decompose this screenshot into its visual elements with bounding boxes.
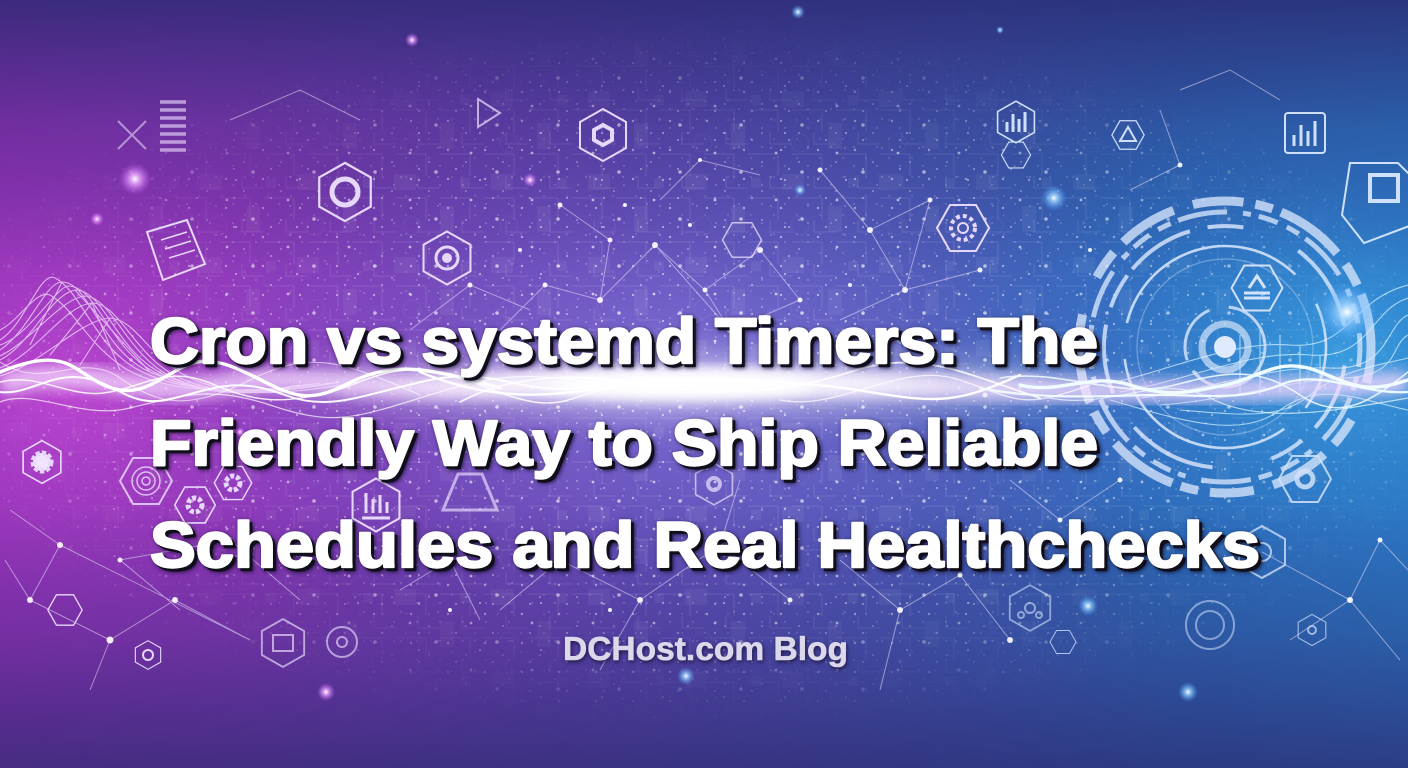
center white strands (420, 363, 1090, 402)
center light streak (230, 351, 1150, 419)
icon: hexagon bottom right (1298, 614, 1326, 646)
energy wave glow (0, 377, 1408, 391)
right wave mesh (1100, 285, 1408, 425)
network nodes (27, 158, 1382, 644)
title (150, 305, 1260, 581)
icon: small outlined hexagon (1001, 142, 1031, 168)
icon: hexagon lower right (1239, 526, 1285, 578)
icon: cross mark (118, 121, 146, 149)
icon: hexagon heart (424, 231, 470, 285)
icon: triangle hexagon (1112, 121, 1144, 149)
title line 3: Schedules and Real Healthchecks (150, 509, 1260, 581)
icon: hexagon center pin (696, 463, 732, 505)
icon: hexagon bottom center (1050, 630, 1076, 654)
source label: DCHost.com Blog (563, 630, 848, 667)
icon: cluster hexagon bottom (1010, 585, 1050, 631)
icon: bar chart hexagon (353, 478, 399, 532)
icon: hexagon ring (319, 163, 371, 221)
dial outer segmented ring (1055, 177, 1395, 517)
icon: play triangle (478, 99, 500, 127)
icon: list lines (160, 102, 186, 150)
left magenta strands (0, 360, 620, 418)
icon: hexagon bottom left small (48, 595, 82, 625)
icon: hexagon cube (580, 109, 626, 161)
icon: gear hexagon pair (175, 466, 252, 523)
right cyan strands (980, 366, 1408, 413)
radial HUD dial (1055, 177, 1395, 517)
icon: ring bottom (327, 627, 357, 657)
dial target center (1185, 307, 1265, 387)
icon: hexagon gear (937, 205, 989, 251)
icon: target hexagon (120, 458, 172, 504)
icon: funnel (443, 474, 497, 510)
icon: ring bottom right (1186, 601, 1234, 649)
icon: bar chart panel (1285, 113, 1325, 153)
icon: gear hexagon left (23, 441, 61, 483)
title line 1: Cron vs systemd Timers: The (150, 305, 1098, 377)
title line 2: Friendly Way to Ship Reliable (150, 407, 1098, 479)
icon: screen octagon (1342, 163, 1408, 243)
dial hexagon icon (1232, 265, 1282, 311)
dial inner arcs (1101, 223, 1349, 471)
dial lower hexagon icon (1279, 456, 1331, 502)
icon: hexagon bottom panel (262, 619, 304, 667)
icon: hexagon bottom left (135, 641, 161, 669)
left wave mesh (0, 277, 360, 393)
icon: outlined hexagons center (722, 223, 762, 257)
icon: hexagon bar chart (998, 101, 1034, 143)
icon: document (147, 220, 205, 280)
energy wave strands (0, 360, 1408, 418)
